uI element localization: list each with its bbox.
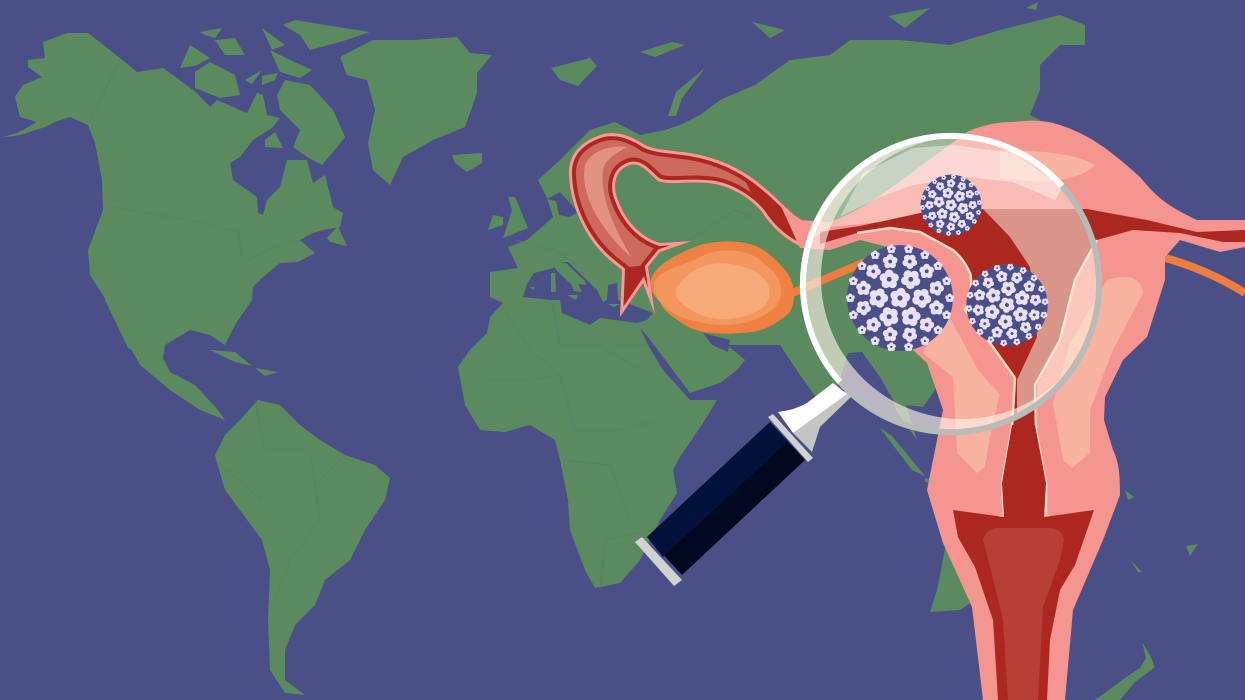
map: Pacific islands (1125, 490, 1198, 572)
handle: end cap (635, 537, 682, 586)
map: borders (88, 60, 790, 600)
map: Arctic islands (180, 20, 370, 165)
map: Baltic sea (547, 192, 578, 217)
handle: flared neck shadow (793, 390, 853, 452)
uterus: pink body (780, 121, 1245, 700)
uterus: red cavity and tubes (820, 209, 1245, 450)
virus: large left (846, 245, 954, 351)
magnifier ring (803, 136, 1099, 432)
uterus: left wall lining (857, 228, 1015, 378)
map: Eurasia and Africa (458, 15, 1085, 588)
map: Newfoundland (327, 226, 347, 246)
handle: navy grip (647, 422, 805, 575)
map: Italy (553, 263, 586, 292)
map: South America (215, 400, 390, 695)
handle: flared neck (778, 383, 847, 433)
handle: grip lit side (647, 422, 787, 557)
tube: fimbriae red (628, 266, 642, 292)
lens: crescent highlight (840, 145, 1063, 217)
uterus: right pad (1053, 277, 1143, 468)
uterus (780, 121, 1245, 700)
map: UK and Ireland (488, 197, 528, 238)
right ovarian ligament (1158, 256, 1245, 293)
lens: right glare (983, 209, 1096, 413)
virus: right (950, 248, 1065, 362)
tube: salmon interior with red lining (569, 133, 812, 317)
tube: pink outer wall (569, 133, 812, 317)
ring: shaded arc (840, 186, 1099, 432)
uterus: right wall lining (1035, 240, 1097, 517)
map: Persian Gulf (703, 333, 730, 352)
magnifier lens (806, 138, 1096, 430)
map: Australia (930, 540, 975, 612)
uterus: cervix lining (998, 378, 1015, 517)
magnifier handle (635, 383, 853, 586)
uterus: top highlight (1000, 150, 1095, 182)
left ovarian ligament (790, 262, 865, 294)
map: Greenland (340, 37, 492, 185)
map: Mediterranean sea (523, 262, 653, 325)
map: Caribbean (210, 350, 278, 376)
uterus: vagina inner (983, 528, 1064, 700)
map: Novaya Zemlya (668, 68, 705, 116)
map: Baja California (105, 300, 135, 352)
tube: solid red end (746, 182, 802, 246)
ring: bright arc (803, 136, 1062, 382)
virus particles (846, 167, 1065, 362)
virus: top (913, 167, 989, 242)
lens: rim tint (806, 140, 1060, 430)
map: Iceland (452, 153, 482, 172)
lens: top glare (814, 138, 1075, 238)
handle: collar (768, 414, 813, 462)
map: New Zealand (1095, 642, 1155, 700)
map: Indonesia (880, 428, 960, 486)
uterus: inner pink ridge (950, 310, 1012, 398)
map: Mediterranean islands (530, 273, 620, 307)
fallopian tube (569, 133, 815, 317)
map: North America (0, 33, 343, 420)
map: Arctic Russia islands (551, 2, 1038, 86)
ovary (650, 242, 794, 334)
tube: pale highlight (584, 147, 632, 258)
uterus: left pad (923, 320, 1000, 473)
uterus: cervical canal and vagina (953, 425, 1094, 700)
